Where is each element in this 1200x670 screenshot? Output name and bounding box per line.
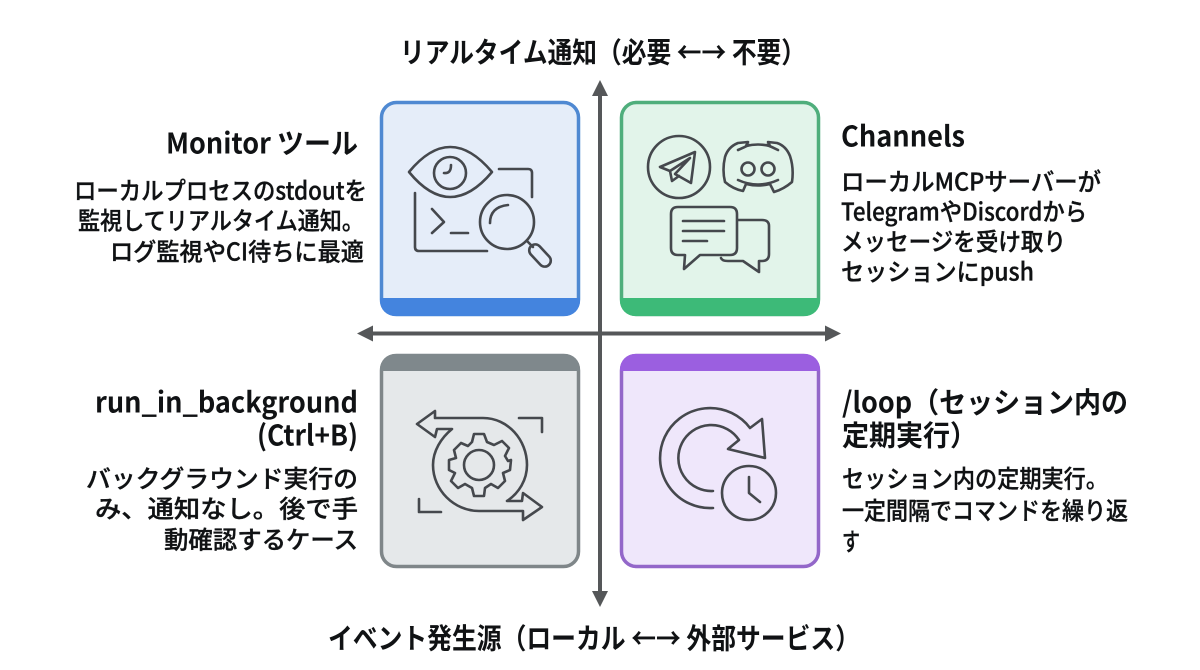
panel: Channels icon card — [620, 102, 820, 316]
text block: loop: す — [842, 524, 860, 558]
text block: Channels: Channels — [841, 114, 965, 156]
text block: Monitor tool: ログ監視やCI待ちに最適 — [110, 234, 364, 268]
text block: run_in_background: み、通知なし。後で手 — [95, 490, 358, 526]
text block: Monitor tool: 監視してリアルタイム通知。 — [78, 202, 364, 238]
text block: Channels: ローカルMCPサーバーが — [841, 164, 1101, 198]
text block: Channels: メッセージを受け取り — [841, 224, 1066, 258]
panel: run_in_background icon card — [380, 354, 580, 566]
text block: Channels: セッションにpush — [841, 254, 1034, 288]
vertical axis arrow — [592, 80, 608, 607]
text block: loop: 定期実行） — [842, 414, 977, 454]
text block: run_in_background — [86, 380, 358, 556]
text block: loop: 一定間隔でコマンドを繰り返 — [842, 492, 1128, 528]
text block: run_in_background: 動確認するケース — [164, 522, 358, 556]
panel: loop icon card — [620, 354, 820, 566]
text block: run_in_background: run_in_background — [95, 380, 358, 422]
text block: run_in_background: (Ctrl+B) — [257, 414, 358, 454]
text block: Monitor tool: Monitor ツール — [166, 122, 358, 162]
icon: gear with circular arrows — [417, 411, 542, 520]
text block: Channels — [841, 114, 1101, 288]
text block: run_in_background: バックグラウンド実行の — [86, 460, 358, 496]
text block: Monitor tool — [74, 122, 367, 268]
icon: Telegram, Discord and chat bubbles — [648, 136, 793, 272]
horizontal axis arrow — [357, 326, 841, 342]
panel: Monitor icon card — [380, 102, 580, 316]
text block: loop: セッション内の定期実行。 — [842, 460, 1108, 496]
icon: circular arrow with clock — [660, 408, 776, 520]
text block: Channels: TelegramやDiscordから — [841, 194, 1087, 228]
axis title: top: リアルタイム通知（必要 ←→ 不要） — [400, 30, 806, 72]
axis title: bottom: イベント発生源（ローカル ←→ 外部サービス） — [328, 616, 860, 658]
text block: loop: /loop（セッション内の — [842, 380, 1128, 422]
icon: eye, terminal and magnifier — [409, 147, 553, 269]
text block: Monitor tool: ローカルプロセスのstdoutを — [74, 172, 367, 208]
text block: loop — [842, 380, 1128, 558]
